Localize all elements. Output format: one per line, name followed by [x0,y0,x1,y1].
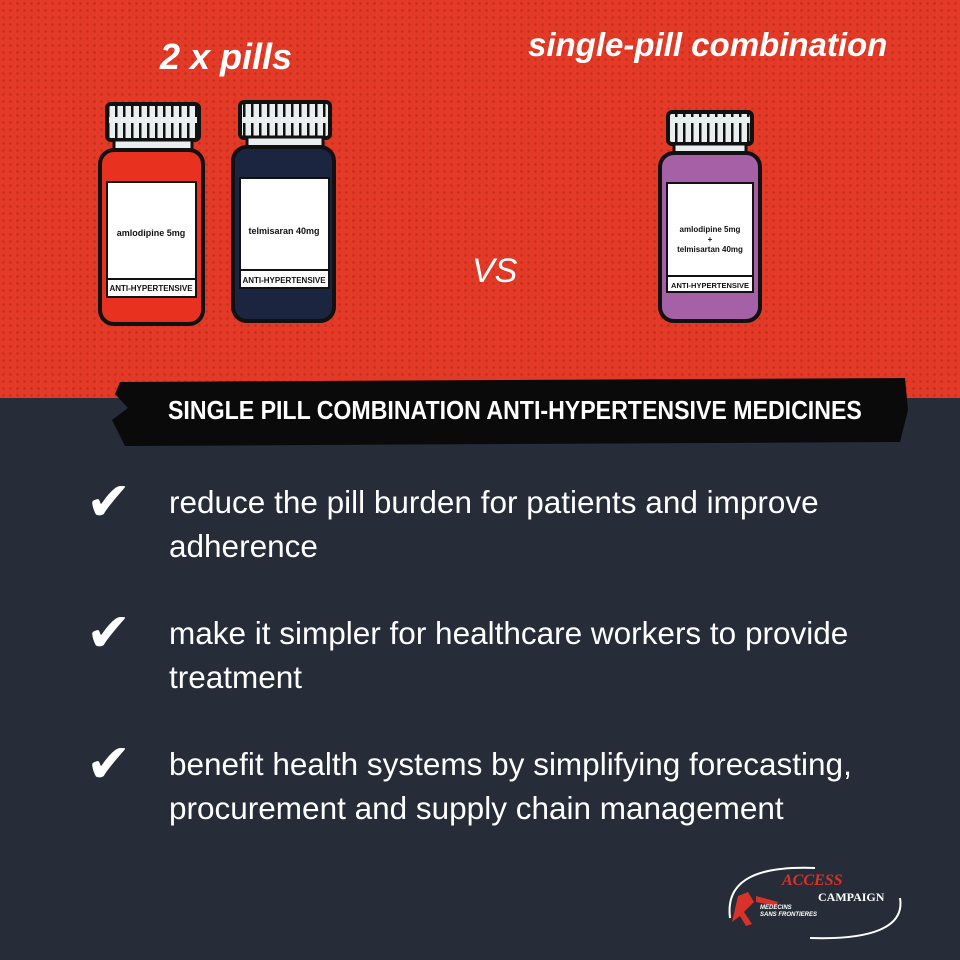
heading: single-pill combination: single-pill combination [528,26,887,63]
logo: MSF access campaign: ACCESS [782,872,842,889]
logo: MSF access campaign: MEDECINS [760,905,792,911]
vs label: VS [472,252,517,290]
bottle: amlodipine: ANTI-HYPERTENSIVE [109,284,193,293]
benefit list: procurement and supply chain management [169,790,784,826]
bottle: telmisartan [233,102,334,321]
bottle: combination: telmisartan 40mg [677,245,743,254]
benefit list: ✔ [86,601,131,664]
logo: MSF access campaign [728,866,902,940]
bottle: combination: ANTI-HYPERTENSIVE [671,281,749,290]
benefit list [86,470,852,826]
benefit 3 [86,732,852,826]
bottle: combination [660,112,760,321]
bottle: telmisartan: ANTI-HYPERTENSIVE [242,276,326,285]
logo: MSF access campaign: SANS FRONTIERES [760,912,817,918]
bottle: telmisartan: telmisaran 40mg [248,226,320,236]
red header background [0,0,960,398]
benefit 1 [86,470,819,564]
bottle: amlodipine: amlodipine 5mg [117,228,185,238]
bottle: amlodipine [100,104,203,324]
benefit list: treatment [169,659,302,695]
heading: 2 x pills: 2 x pills [160,36,292,77]
bottle: combination: amlodipine 5mg [680,225,741,234]
benefit list: ✔ [86,732,131,795]
bottles illustration [98,100,762,326]
banner: brush stroke title: SINGLE PILL COMBINATION ANTI-HYPERTENSIVE MEDICINES [168,395,862,425]
benefit list: make it simpler for healthcare workers to provide [169,615,848,651]
benefit 2 [86,601,848,695]
benefit list: reduce the pill burden for patients and improve [169,484,819,520]
logo: MSF access campaign: CAMPAIGN [818,890,884,904]
benefit list: ✔ [86,470,131,533]
benefit list: benefit health systems by simplifying forecasting, [169,746,852,782]
banner: brush stroke title [112,378,908,446]
bottle: combination: + [708,235,713,244]
benefit list: adherence [169,528,318,564]
